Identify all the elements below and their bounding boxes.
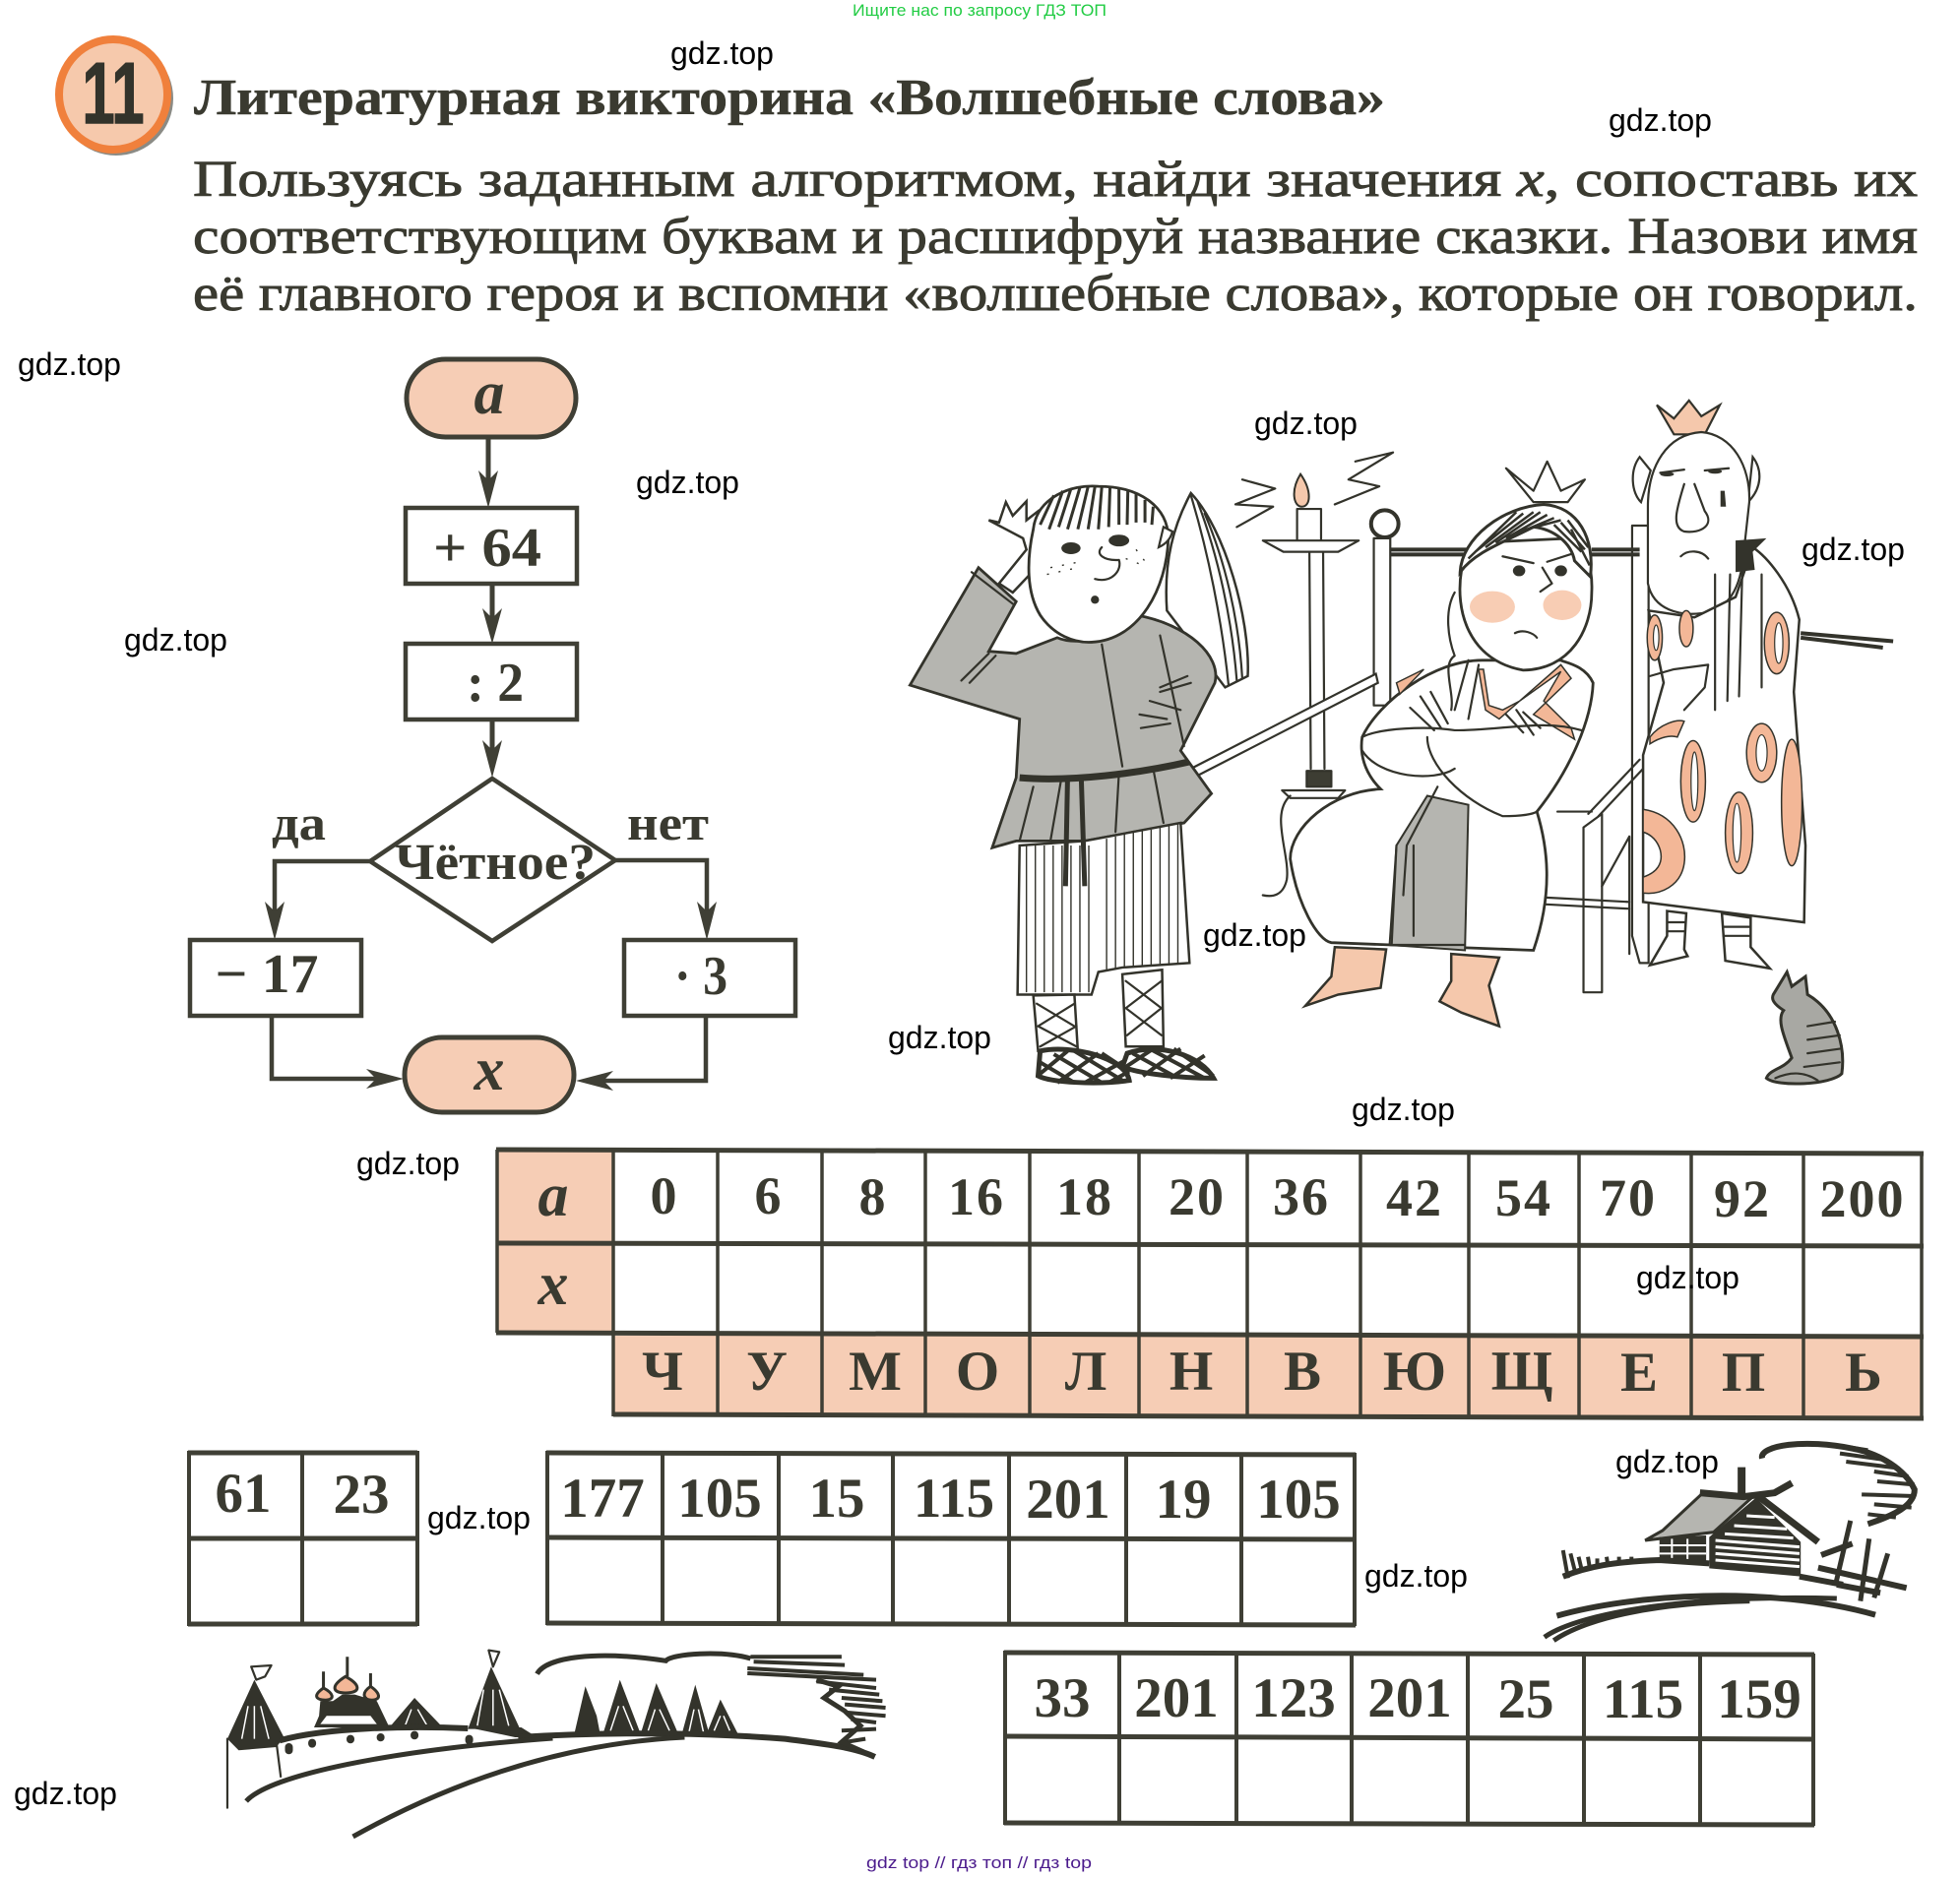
row label x: x xyxy=(537,1251,569,1318)
exercise number badge: 11 xyxy=(83,44,144,142)
row a values: 18 xyxy=(1056,1167,1113,1226)
arrow: -17 to x xyxy=(272,1018,404,1089)
hair xyxy=(1041,486,1153,530)
decision diamond: Чётное? xyxy=(395,835,596,891)
shirt xyxy=(910,568,1216,847)
face xyxy=(1513,565,1525,576)
row a values: 20 xyxy=(1169,1167,1226,1226)
tree crown xyxy=(1762,1444,1915,1524)
watermarks: gdz.top xyxy=(1636,1260,1739,1295)
answer table: 33 201 123 201 25 115 159: 201 xyxy=(1134,1667,1219,1729)
answer table: 177 105 15 115 201 19 105: 15 xyxy=(809,1468,864,1530)
top watermark text: Ищите нас по запросу ГДЗ ТОП xyxy=(853,1,1106,20)
tree crown xyxy=(537,1654,750,1674)
label: да: да xyxy=(272,795,326,850)
cheeks xyxy=(1470,592,1515,623)
answer table: 33 201 123 201 25 115 159: 159 xyxy=(1717,1668,1802,1730)
peach cells xyxy=(496,1151,613,1335)
arrow: yes branch xyxy=(265,861,370,940)
table grid xyxy=(496,1150,1924,1418)
watermarks: gdz.top xyxy=(1609,102,1712,138)
answer table: 61 23 xyxy=(188,1451,417,1626)
box: +64: + 64 xyxy=(433,518,541,579)
instructions text block: Пользуясь заданным алгоритмом, найди значения x, сопоставь их xyxy=(193,152,1918,208)
watermarks: gdz.top xyxy=(427,1500,531,1535)
icon: throne xyxy=(1371,510,1649,992)
icon: crown xyxy=(1657,401,1720,434)
row of cipher letters xyxy=(642,1341,1882,1404)
dress panel xyxy=(1390,796,1469,950)
grass xyxy=(1563,1550,1631,1578)
row a values: 70 xyxy=(1600,1168,1657,1227)
row a values: 16 xyxy=(948,1167,1005,1226)
boots xyxy=(1305,947,1386,1006)
end node x xyxy=(405,1036,574,1112)
start node a: a xyxy=(474,360,504,427)
answer table: 61 23: 61 xyxy=(215,1463,272,1525)
dress xyxy=(1291,660,1593,950)
king boots xyxy=(1650,911,1687,966)
king figure xyxy=(1633,401,1893,969)
illustration: boy, princess and king xyxy=(910,401,1893,1084)
flowchart xyxy=(190,359,795,1112)
fence xyxy=(1818,1543,1907,1593)
box: +64 xyxy=(406,508,577,584)
sword xyxy=(1191,674,1378,776)
road curves xyxy=(1556,1596,1875,1616)
arrow: a to +64 xyxy=(478,438,498,508)
small tent xyxy=(390,1698,443,1727)
left tower xyxy=(227,1680,284,1750)
crown xyxy=(1506,462,1585,502)
row of cipher letters: В xyxy=(1284,1341,1321,1403)
box: -17: − 17 xyxy=(215,944,319,1005)
arrow: :2 to diamond xyxy=(482,721,502,778)
row of cipher letters: О xyxy=(956,1341,999,1403)
start node a xyxy=(407,359,576,437)
illustration: house on a hill xyxy=(1545,1444,1915,1641)
row of cipher letters: М xyxy=(849,1341,902,1403)
end node x: x xyxy=(473,1036,504,1103)
king hand xyxy=(1650,664,1708,710)
log wall xyxy=(1709,1498,1801,1577)
watermarks: gdz.top xyxy=(14,1776,117,1811)
walls and ground xyxy=(280,1727,875,1757)
row of cipher letters: Е xyxy=(1620,1342,1658,1404)
answer table: 177 105 15 115 201 19 105 xyxy=(546,1451,1356,1626)
exercise number badge xyxy=(59,39,173,156)
box: ·3 xyxy=(624,940,795,1016)
hand xyxy=(988,501,1041,593)
row a values: 36 xyxy=(1273,1167,1330,1226)
watermarks: gdz.top xyxy=(670,35,774,71)
answer table: 177 105 15 115 201 19 105: 105 xyxy=(677,1468,762,1530)
church xyxy=(314,1657,390,1727)
instructions text block: её главного героя и вспомни «волшебные слова», которые он говорил. xyxy=(193,266,1918,322)
chimney xyxy=(1738,1468,1745,1494)
belt xyxy=(1020,762,1189,779)
answer table: 177 105 15 115 201 19 105: 105 xyxy=(1256,1469,1341,1531)
watermarks: gdz.top xyxy=(124,622,227,657)
answer table: 177 105 15 115 201 19 105: 201 xyxy=(1026,1469,1110,1531)
watermarks: gdz.top xyxy=(1203,917,1306,953)
box: ·3: · 3 xyxy=(674,946,727,1007)
box: :2: : 2 xyxy=(467,653,524,714)
row of cipher letters: Щ xyxy=(1491,1341,1552,1403)
arrow: +64 to :2 xyxy=(482,586,502,644)
watermarks: gdz.top xyxy=(1254,406,1358,441)
answer table: 177 105 15 115 201 19 105: 177 xyxy=(560,1468,645,1530)
label: нет: нет xyxy=(627,795,709,850)
watermarks: gdz.top xyxy=(1352,1092,1455,1127)
answer table: 61 23: 23 xyxy=(333,1464,390,1526)
row a values: 0 xyxy=(650,1166,679,1225)
answer table: 33 201 123 201 25 115 159: 123 xyxy=(1251,1667,1336,1729)
watermarks: gdz.top xyxy=(356,1146,460,1181)
row a values: 54 xyxy=(1495,1168,1552,1227)
row a values: 200 xyxy=(1819,1169,1906,1228)
wall dots xyxy=(288,1735,470,1750)
row of cipher letters: Ч xyxy=(642,1341,683,1403)
leggings xyxy=(1034,994,1078,1051)
row a values xyxy=(650,1166,1906,1228)
boy figure xyxy=(910,486,1378,1083)
row a values: 6 xyxy=(754,1166,784,1225)
robe xyxy=(1643,547,1805,922)
answer table: 177 105 15 115 201 19 105: 115 xyxy=(914,1468,994,1530)
row label a: a xyxy=(537,1162,569,1229)
answer table: 33 201 123 201 25 115 159: 33 xyxy=(1034,1667,1091,1729)
second tower xyxy=(488,1651,499,1666)
instructions text block xyxy=(193,152,1918,322)
icon: cat xyxy=(1766,972,1843,1084)
watermarks: gdz.top xyxy=(18,346,121,382)
king face xyxy=(1660,469,1729,559)
arrow: ·3 to x xyxy=(576,1018,706,1091)
scabbard xyxy=(1167,493,1248,687)
watermarks: gdz.top xyxy=(636,465,739,500)
row of cipher letters: П xyxy=(1722,1342,1765,1404)
icon: candle stand with lightning xyxy=(1235,453,1393,896)
crossed arms xyxy=(1362,725,1581,816)
table: a / x / letters xyxy=(496,1150,1924,1418)
beard tassels xyxy=(1715,565,1761,710)
answer table: 33 201 123 201 25 115 159: 25 xyxy=(1498,1668,1553,1730)
answer table: 177 105 15 115 201 19 105: 19 xyxy=(1156,1469,1211,1531)
pants xyxy=(1018,823,1189,994)
row a values: 42 xyxy=(1386,1168,1443,1227)
bottom watermark text: gdz top // гдз топ // гдз top xyxy=(866,1853,1092,1872)
princess figure xyxy=(1291,462,1593,1027)
watermarks: gdz.top xyxy=(1802,532,1905,567)
answer table: 33 201 123 201 25 115 159 xyxy=(1004,1651,1814,1826)
row of cipher letters: Ю xyxy=(1383,1341,1446,1403)
answer table: 33 201 123 201 25 115 159: 115 xyxy=(1603,1668,1683,1730)
chest ties xyxy=(962,654,1191,728)
watermarks: gdz.top xyxy=(888,1020,991,1055)
face xyxy=(1061,542,1081,554)
decision diamond xyxy=(370,779,615,941)
fingers xyxy=(1410,692,1541,735)
row of cipher letters: Н xyxy=(1170,1341,1213,1403)
answer table: 33 201 123 201 25 115 159: 201 xyxy=(1367,1667,1452,1729)
arrow: no branch xyxy=(615,860,717,940)
head xyxy=(1460,538,1592,670)
roof xyxy=(1645,1493,1753,1540)
watermarks: gdz.top xyxy=(1615,1444,1719,1479)
row of cipher letters: Ь xyxy=(1845,1342,1882,1404)
collar xyxy=(1479,664,1574,739)
illustration: kremlin landscape xyxy=(227,1651,886,1837)
box: -17 xyxy=(190,940,361,1016)
box: :2 xyxy=(406,644,577,720)
side wing xyxy=(1660,1535,1706,1565)
watermarks: gdz.top xyxy=(1364,1558,1468,1594)
row of cipher letters: У xyxy=(746,1341,788,1403)
head xyxy=(1029,486,1169,643)
row a values: 8 xyxy=(858,1167,888,1226)
row a values: 92 xyxy=(1714,1169,1771,1228)
title: Литературная викторина «Волшебные слова» xyxy=(194,70,1385,126)
hair xyxy=(1460,504,1591,577)
trees xyxy=(575,1686,600,1732)
robe peach rings xyxy=(1643,610,1802,894)
instructions text block: соответствующим буквам и расшифруй название сказки. Назови имя xyxy=(193,209,1918,265)
staff xyxy=(1801,633,1893,648)
bast shoes xyxy=(1039,1049,1129,1083)
row of cipher letters: Л xyxy=(1065,1341,1106,1403)
braid xyxy=(1448,593,1479,719)
